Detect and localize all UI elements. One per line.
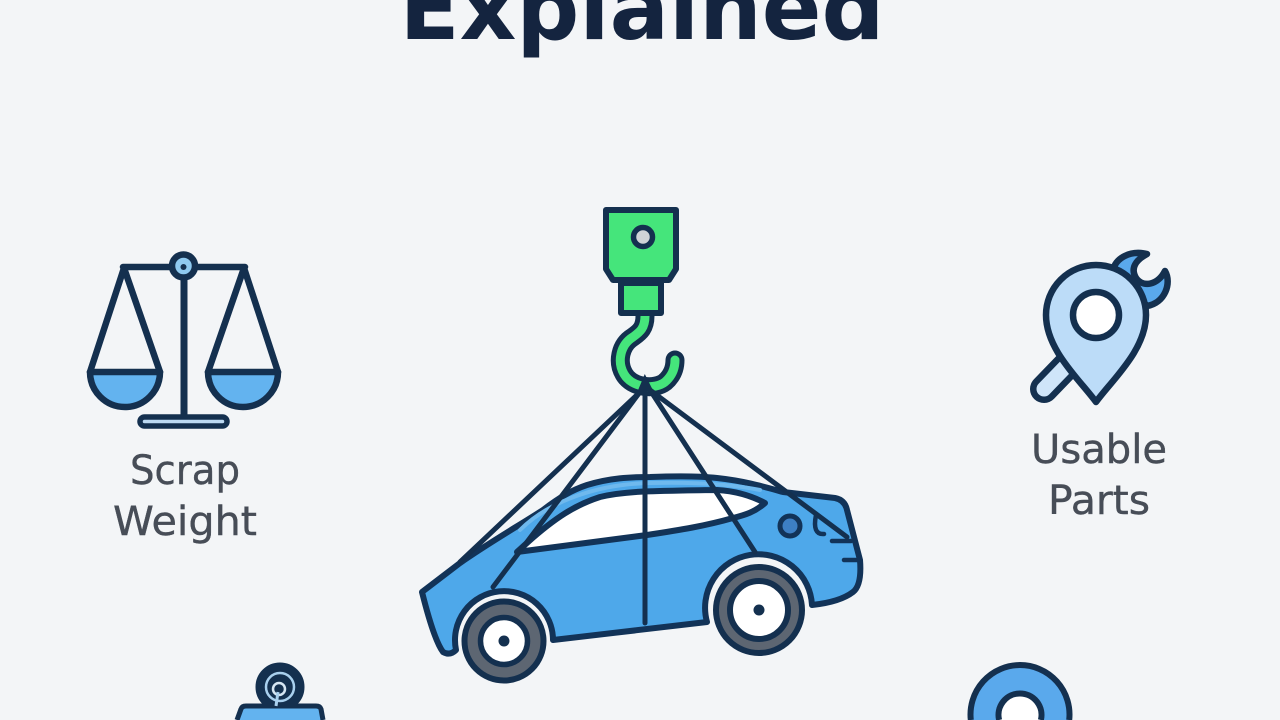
hook neck	[621, 283, 661, 313]
label: usable parts: Usable	[1031, 425, 1167, 473]
car	[422, 476, 860, 680]
hook outline	[620, 316, 675, 387]
beam	[123, 264, 245, 270]
rear light	[780, 516, 800, 536]
tag string	[276, 692, 278, 706]
label: scrap weight: Weight	[113, 497, 257, 545]
base	[140, 417, 227, 426]
pivot	[172, 254, 195, 278]
pole	[180, 270, 188, 416]
roof highlight	[520, 483, 760, 530]
lifting ropes	[460, 380, 847, 623]
label: scrap weight: Scrap	[130, 446, 240, 494]
icon: bottom left partial tag	[237, 665, 323, 720]
icon: usable parts pin and wrench	[1044, 253, 1168, 402]
hook block	[606, 210, 676, 280]
left pan fill	[90, 372, 160, 407]
pin	[1046, 265, 1146, 402]
right pan fill	[208, 372, 278, 407]
window	[517, 490, 765, 552]
pan strings	[90, 268, 278, 372]
front wheel	[464, 602, 544, 680]
label: scrap weight	[113, 446, 257, 545]
icon: scrap weight scale	[90, 254, 278, 426]
tag body	[237, 706, 323, 720]
label: usable parts: Parts	[1048, 476, 1150, 524]
tag ring	[258, 665, 302, 709]
trunk marks	[815, 515, 858, 560]
pin hole	[1073, 292, 1119, 338]
block bolt	[634, 228, 652, 246]
crane hook	[606, 210, 676, 387]
hook fill	[620, 316, 675, 387]
wrench head	[1113, 253, 1168, 306]
rear wheel	[716, 567, 802, 653]
car body	[422, 476, 860, 654]
label: usable parts	[1031, 425, 1167, 524]
icon: bottom right partial ring	[970, 665, 1070, 720]
wrench handle fill	[1044, 360, 1072, 389]
wrench handle outline	[1044, 360, 1072, 389]
